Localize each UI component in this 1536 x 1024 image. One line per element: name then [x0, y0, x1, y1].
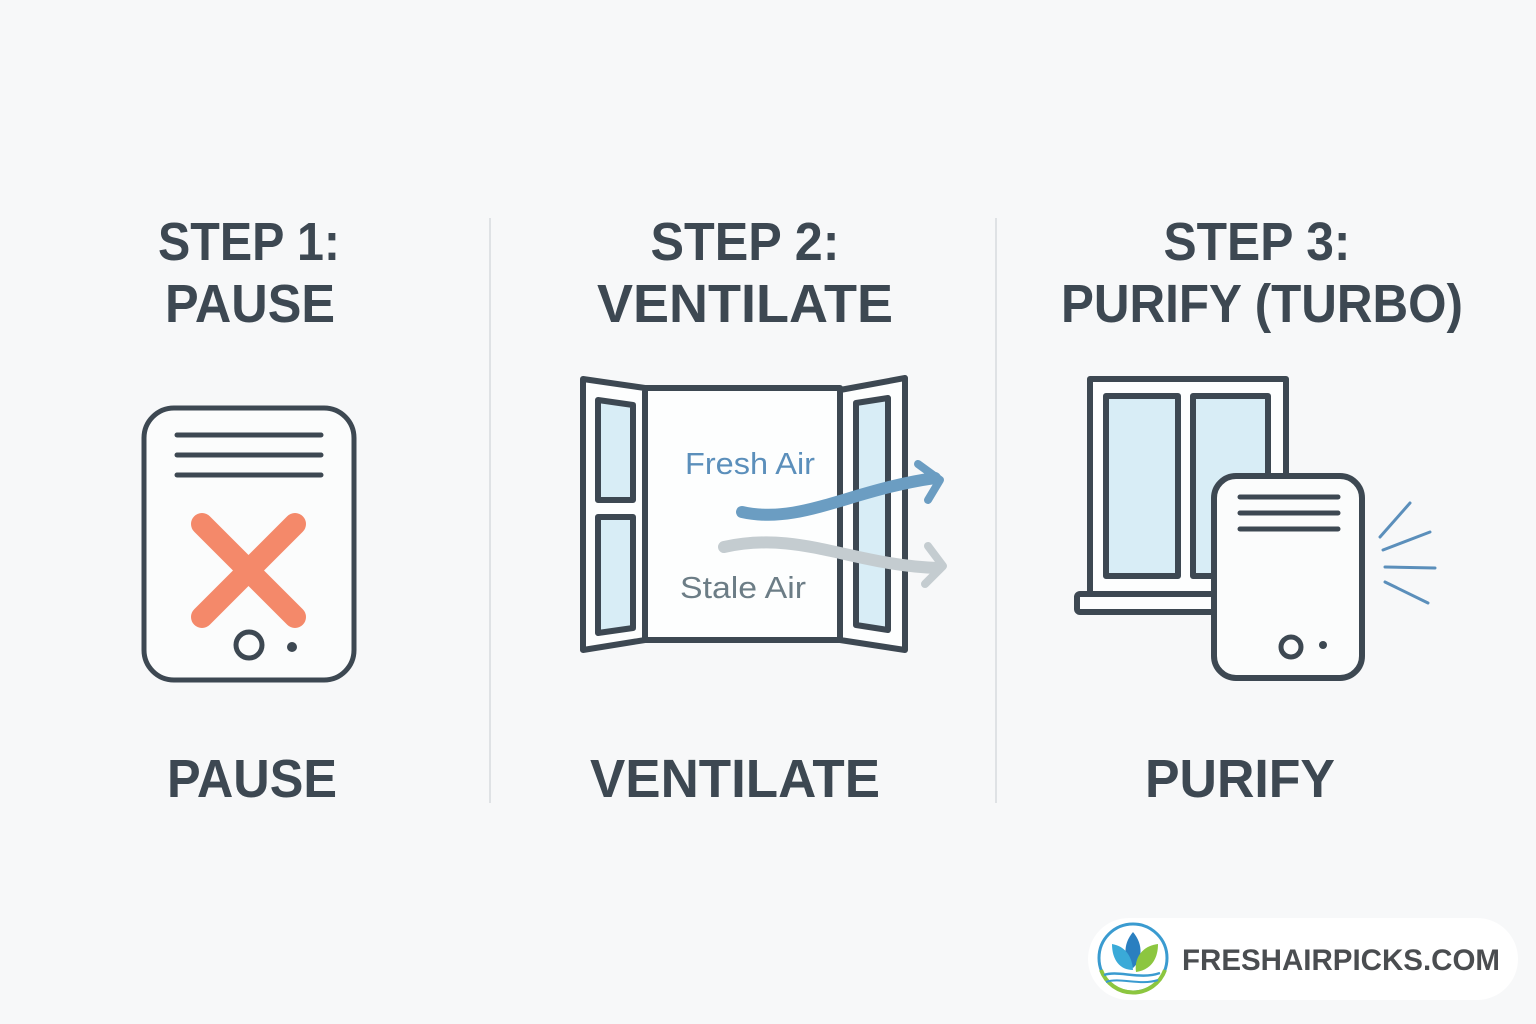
logo badge [1088, 918, 1518, 1000]
icon: turbo rays [1380, 503, 1435, 603]
icon: orange x [202, 524, 295, 617]
icon: logo [1099, 924, 1167, 993]
label: pause: PAUSE [167, 749, 337, 809]
heading: step 1: PAUSE [165, 274, 335, 334]
heading: step 2: STEP 2: [650, 212, 840, 272]
heading: step 2 [597, 212, 893, 334]
heading: step 3 [1061, 212, 1463, 334]
heading: step 3: PURIFY (TURBO) [1061, 274, 1463, 334]
label: ventilate: VENTILATE [590, 749, 880, 809]
heading: step 3: STEP 3: [1164, 212, 1350, 272]
icon: window with purifier [1077, 379, 1435, 678]
heading: step 1: STEP 1: [158, 212, 340, 272]
arrow: fresh air [742, 478, 935, 515]
arrow: stale air [724, 542, 938, 568]
icon: paused purifier [144, 408, 354, 680]
logo badge: FRESHAIRPICKS.COM [1182, 944, 1500, 977]
heading: step 1 [158, 212, 340, 334]
heading: step 2: VENTILATE [597, 274, 893, 334]
label: stale air: Stale Air [680, 570, 806, 605]
label: purify: PURIFY [1145, 749, 1335, 809]
label: fresh air: Fresh Air [685, 446, 815, 481]
icon: open window with airflow [583, 378, 943, 650]
